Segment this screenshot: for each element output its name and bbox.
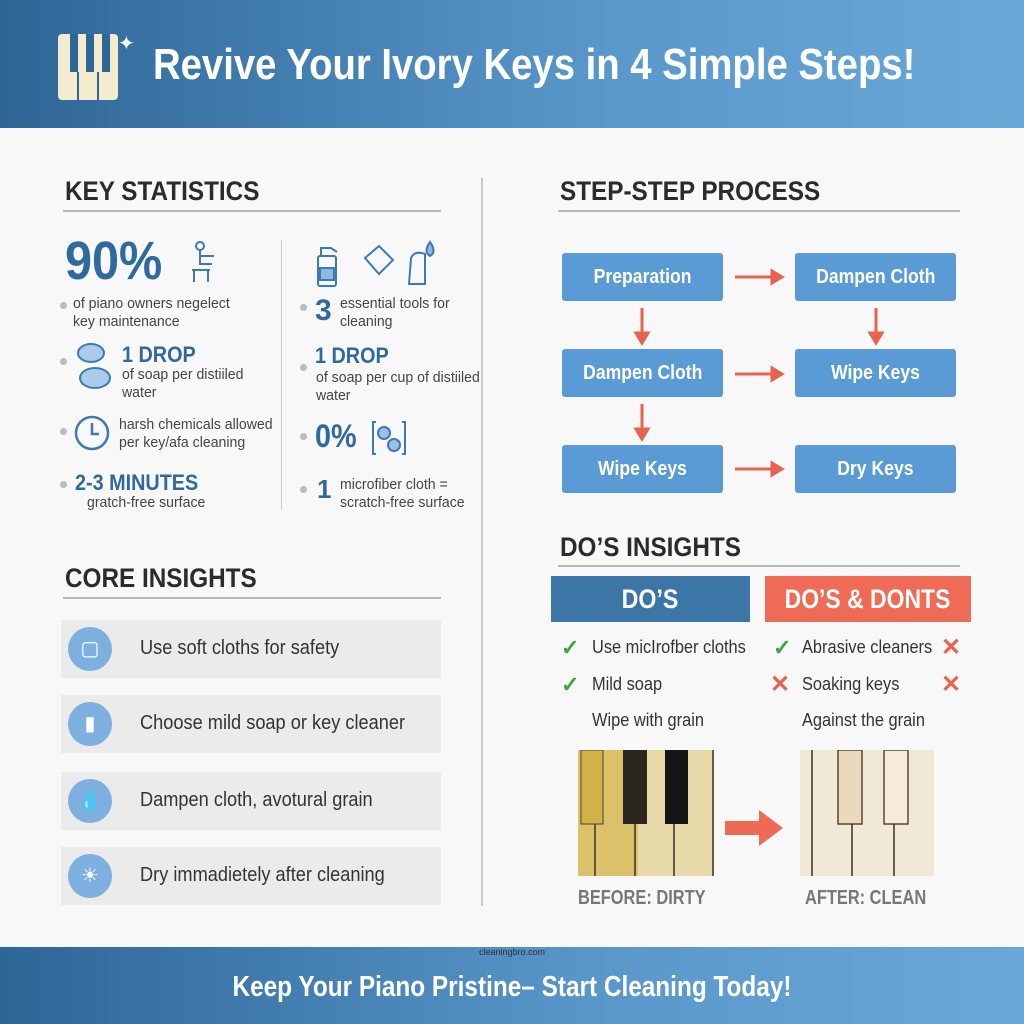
panel: donts: Abrasive cleaners [802, 637, 932, 657]
insight 1: ▢ [81, 638, 99, 660]
panel: statistics left: 2-3 MINUTES [75, 470, 198, 495]
panel: do's: DO’S [622, 584, 679, 614]
header [0, 0, 1024, 128]
flowchart: Preparation [594, 266, 691, 288]
panel: statistics right: 0% [315, 418, 357, 454]
icon: piano keys [58, 33, 135, 100]
panel: statistics left [60, 231, 273, 511]
panel: donts: ✕ [770, 671, 790, 698]
insight 3 [61, 772, 441, 830]
panel: donts [765, 576, 971, 730]
flowchart [562, 253, 956, 493]
panel: statistics right: of soap per cup of distiiled [316, 369, 480, 386]
after image [800, 750, 934, 876]
panel: statistics right: 3 [315, 294, 332, 327]
panel: donts: ✕ [941, 634, 961, 661]
icon: person at piano [192, 241, 214, 282]
insight 2: ▮ [84, 713, 96, 735]
icon: bubbles [372, 421, 406, 455]
panel: do's: ✓ [561, 635, 579, 660]
flowchart: Wipe Keys [831, 362, 920, 384]
panel: statistics left: key maintenance [73, 313, 180, 330]
insight 2: Choose mild soap or key cleaner [140, 712, 405, 734]
insight 4: Dry immadietely after cleaning [140, 864, 385, 886]
insight 1 [61, 620, 441, 678]
panel: donts: Soaking keys [802, 674, 899, 694]
panel: statistics right: water [316, 387, 350, 404]
panel: statistics left: 1 DROP [122, 342, 196, 367]
heading: dos insights: DO’S INSIGHTS [560, 532, 741, 562]
panel: do's [551, 576, 750, 730]
insight 3: 💧 [78, 790, 102, 812]
insight 1: Use soft cloths for safety [140, 637, 339, 659]
panel: donts: Against the grain [802, 710, 925, 730]
title: Revive Your Ivory Keys in 4 Simple Steps! [153, 40, 915, 89]
panel: statistics right: cleaning [340, 313, 393, 330]
footer text: Keep Your Piano Pristine– Start Cleaning Today! [232, 971, 792, 1003]
panel: statistics right [300, 240, 480, 511]
panel: statistics right: 1 [317, 474, 331, 504]
panel: statistics left: harsh chemicals allowed [119, 416, 273, 433]
icon: piano keys: ✦ [118, 33, 135, 55]
insight 3: Dampen cloth, avotural grain [140, 789, 373, 811]
heading: step process: STEP-STEP PROCESS [560, 176, 820, 206]
flowchart: Dry Keys [837, 458, 914, 480]
flowchart: Dampen Cloth [816, 266, 935, 288]
panel: do's: Use micIrofber cloths [592, 637, 746, 657]
panel: donts: DO’S & DONTS [785, 584, 951, 614]
footer [0, 947, 1024, 1024]
panel: statistics right: scratch-free surface [340, 494, 465, 511]
icon: clock [74, 416, 110, 450]
before image [578, 750, 714, 876]
panel: statistics right: microfiber cloth = [340, 476, 448, 493]
panel: statistics left: of soap per distiiled [122, 366, 243, 383]
panel: do's: Mild soap [592, 674, 662, 694]
insight 4 [61, 847, 441, 905]
panel: core insights list [61, 620, 441, 905]
arrow [725, 810, 783, 846]
icon: soap [77, 343, 111, 389]
labels: BEFORE: DIRTY [578, 887, 706, 909]
panel: statistics left: per key/afa cleaning [119, 434, 245, 451]
insight 2 [61, 695, 441, 753]
insight 4: ☀ [81, 865, 99, 887]
arrows [633, 268, 885, 478]
panel: statistics left: 90% [65, 231, 162, 291]
heading: core insights: CORE INSIGHTS [65, 563, 257, 593]
panel: donts: ✕ [941, 671, 961, 698]
heading: key statistics: KEY STATISTICS [65, 176, 259, 206]
panel: statistics right: essential tools for [340, 295, 450, 312]
flowchart: Wipe Keys [598, 458, 687, 480]
panel: do's: ✓ [561, 672, 579, 697]
panel: statistics left: water [122, 384, 156, 401]
panel: do's: Wipe with grain [592, 710, 704, 730]
panel: donts: ✓ [773, 635, 791, 660]
panel: statistics right: 1 DROP [315, 343, 389, 368]
icon: tools [317, 240, 434, 287]
panel: statistics left: of piano owners negelect [73, 295, 230, 312]
text: AFTER: CLEAN [805, 887, 926, 909]
panel: statistics left: gratch-free surface [87, 494, 205, 511]
footer: cleaningbro.com [479, 947, 545, 957]
flowchart: Dampen Cloth [583, 362, 702, 384]
